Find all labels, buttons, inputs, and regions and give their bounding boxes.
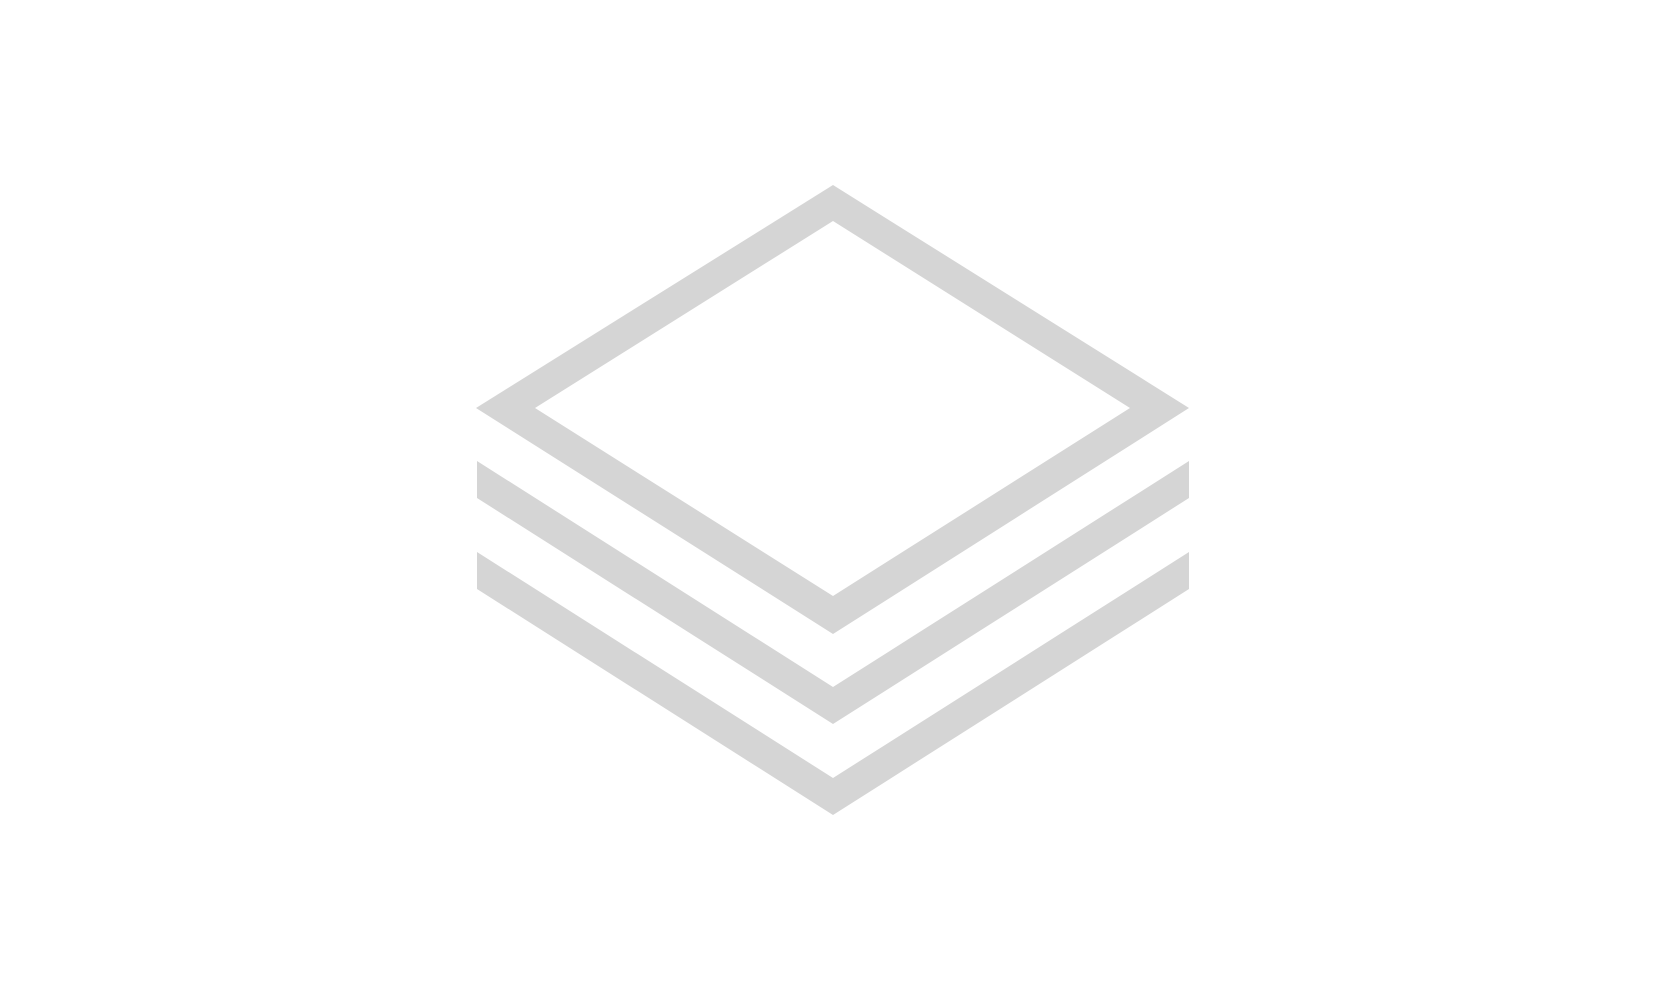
icon: middle chevron layer [477,461,1189,724]
icon: top diamond layer [476,185,1189,634]
icon: bottom chevron layer [477,552,1189,815]
